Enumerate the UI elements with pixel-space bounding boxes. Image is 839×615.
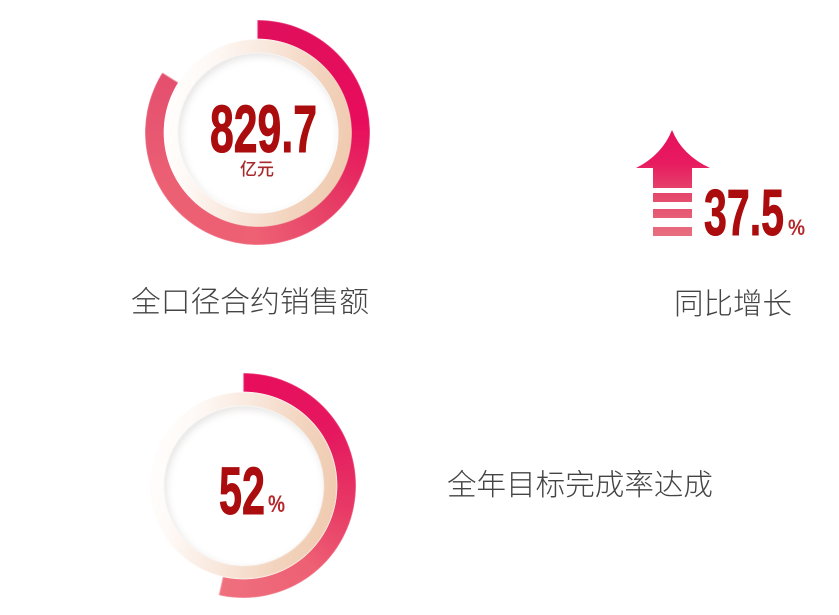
value text [131, 92, 369, 319]
value and label text: 全年目标完成率达成 [447, 469, 713, 502]
value text: 亿元 [240, 160, 274, 179]
value text: 全口径合约销售额 [131, 286, 369, 319]
icon: up arrow [636, 130, 710, 236]
value and label text: 52 [219, 454, 265, 529]
ring: peach track [164, 38, 352, 226]
growth label: 同比增长 [674, 288, 792, 321]
panel: sales total [131, 20, 370, 319]
growth value: 37.5 [704, 176, 784, 249]
value text: 829.7 [210, 92, 317, 167]
inner disc [178, 52, 338, 212]
value and label text [219, 454, 713, 529]
inner disc [164, 406, 324, 566]
ring: sales progress [145, 20, 370, 245]
panel: target completion [164, 373, 713, 598]
ring: target progress [218, 373, 356, 598]
value and label text: % [268, 491, 285, 518]
ring: peach track [150, 392, 337, 579]
panel: year-on-year growth [636, 130, 805, 321]
percent sign: % [788, 215, 805, 240]
